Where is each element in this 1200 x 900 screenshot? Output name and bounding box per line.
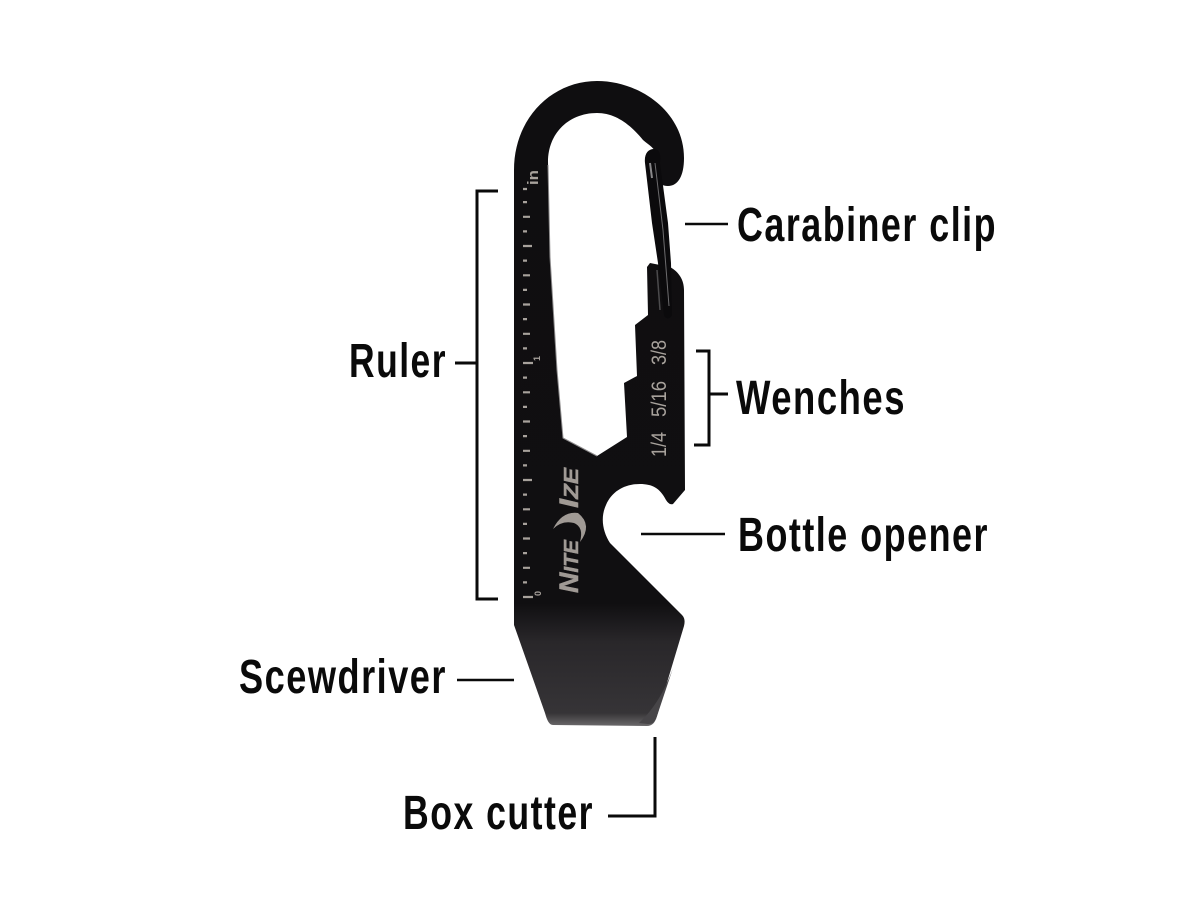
callout: carabiner clip: Carabiner clip	[737, 199, 997, 252]
callout: screwdriver: Scewdriver	[239, 651, 447, 704]
callout: wrenches: Wenches	[736, 372, 906, 425]
wrench sizes: 3/8	[648, 340, 671, 365]
callout: bottle opener: Bottle opener	[738, 509, 989, 562]
inner edge highlight	[548, 165, 597, 456]
callout: box cutter: Box cutter	[403, 787, 594, 840]
ruler numbers: in	[525, 170, 542, 185]
carabiner clip wire	[645, 149, 672, 318]
ruler numbers	[525, 170, 543, 596]
brand logo: IZE	[554, 467, 584, 508]
ruler numbers: 0	[533, 591, 543, 596]
tool illustration	[514, 81, 685, 726]
tool body	[514, 81, 685, 726]
brand logo: NITE	[554, 539, 584, 593]
ruler numbers: 1	[532, 356, 542, 361]
callout: ruler: Ruler	[349, 335, 447, 388]
brand logo	[553, 467, 586, 593]
callout: ruler	[349, 191, 498, 599]
wrench sizes: 1/4	[648, 432, 671, 457]
wrench sizes	[648, 340, 671, 457]
wrench sizes: 5/16	[648, 381, 671, 417]
callout: wrenches	[694, 351, 906, 445]
ruler markings	[523, 189, 533, 597]
box cutter facet	[639, 668, 673, 724]
callout: box cutter	[403, 737, 655, 840]
